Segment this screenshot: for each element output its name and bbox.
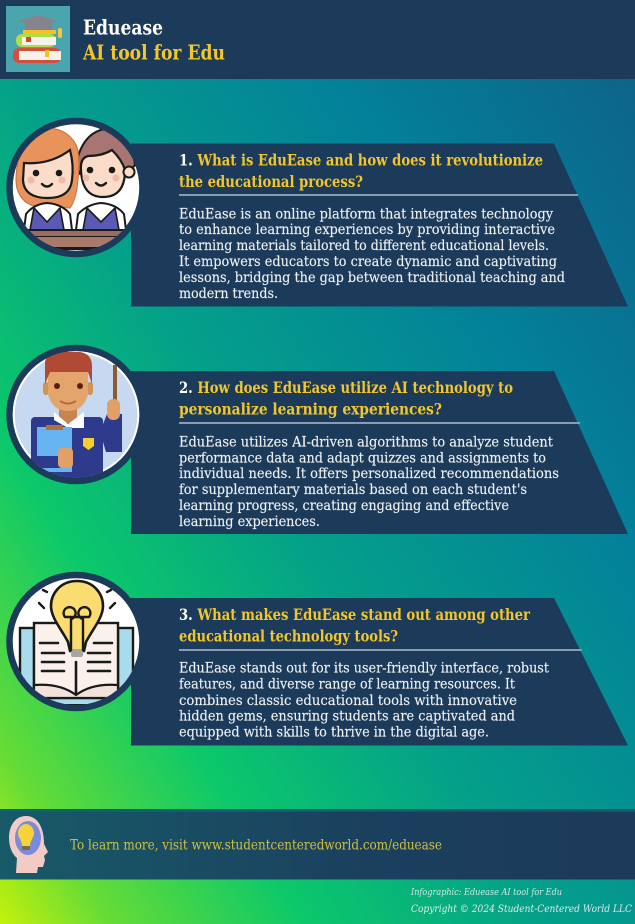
- icon: light bulb over open book: [10, 575, 142, 710]
- subtitle: AI tool for Edu: [82, 40, 225, 64]
- text block: answer 3: combines classic educational tools with innovative: [179, 693, 517, 709]
- text block: answer 1: learning materials tailored to different educational levels.: [179, 238, 549, 254]
- heading: question 3: 3. What makes EduEase stand out among other: [179, 605, 531, 624]
- credit line: Infographic: Eduease AI tool for Edu: [410, 887, 562, 898]
- icon: head with light bulb: [9, 816, 48, 873]
- text block: answer 3: equipped with skills to thrive in the digital age.: [179, 724, 489, 740]
- text block: answer 1: It empowers educators to create dynamic and captivating: [179, 254, 557, 270]
- text block: answer 2: performance data and adapt quizzes and assignments to: [179, 450, 546, 466]
- text block: answer 3: hidden gems, ensuring students are captivated and: [179, 708, 515, 724]
- panel: question 2: [131, 371, 628, 534]
- icon: stacked books with graduation cap: [6, 6, 70, 72]
- text block: answer 3: EduEase stands out for its user-friendly interface, robust: [179, 660, 549, 676]
- text block: answer 2: individual needs. It offers personalized recommendations: [179, 466, 559, 482]
- panel: question 3: educational technology tools?: [179, 626, 398, 646]
- footer call-to-action band: [0, 809, 635, 880]
- panel: question 3: [131, 598, 628, 746]
- text block: answer 1: EduEase is an online platform that integrates technology: [179, 206, 553, 222]
- text block: answer 1: [179, 206, 565, 302]
- text block: answer 2: learning progress, creating engaging and effective: [179, 498, 509, 514]
- panel: question 1: [131, 144, 628, 306]
- panel: question 1: the educational process?: [179, 172, 363, 191]
- text block: answer 2: learning experiences.: [179, 514, 320, 530]
- heading: question 1: 1. What is EduEase and how does it revolutionize: [179, 150, 543, 170]
- panel: question 2: personalize learning experiences?: [179, 400, 442, 418]
- text block: answer 2: EduEase utilizes AI-driven algorithms to analyze student: [179, 434, 553, 450]
- icon: two students at a desk: [10, 121, 142, 254]
- text block: answer 2: [179, 434, 559, 530]
- text block: answer 1: lessons, bridging the gap between traditional teaching and: [179, 270, 565, 286]
- title: Eduease: [83, 16, 163, 40]
- call to action text: To learn more, visit www.studentcenteredworld.com/eduease: [70, 838, 442, 854]
- text block: answer 2: for supplementary materials based on each student's: [179, 482, 527, 498]
- text block: answer 3: features, and diverse range of learning resources. It: [179, 676, 515, 692]
- text block: answer 3: [179, 660, 549, 740]
- text block: answer 1: modern trends.: [179, 286, 278, 302]
- text block: answer 1: to enhance learning experiences by providing interactive: [179, 222, 555, 238]
- header band: [0, 0, 635, 79]
- heading: question 2: 2. How does EduEase utilize AI technology to: [179, 378, 513, 397]
- icon: teacher with pointer and clipboard: [10, 348, 142, 481]
